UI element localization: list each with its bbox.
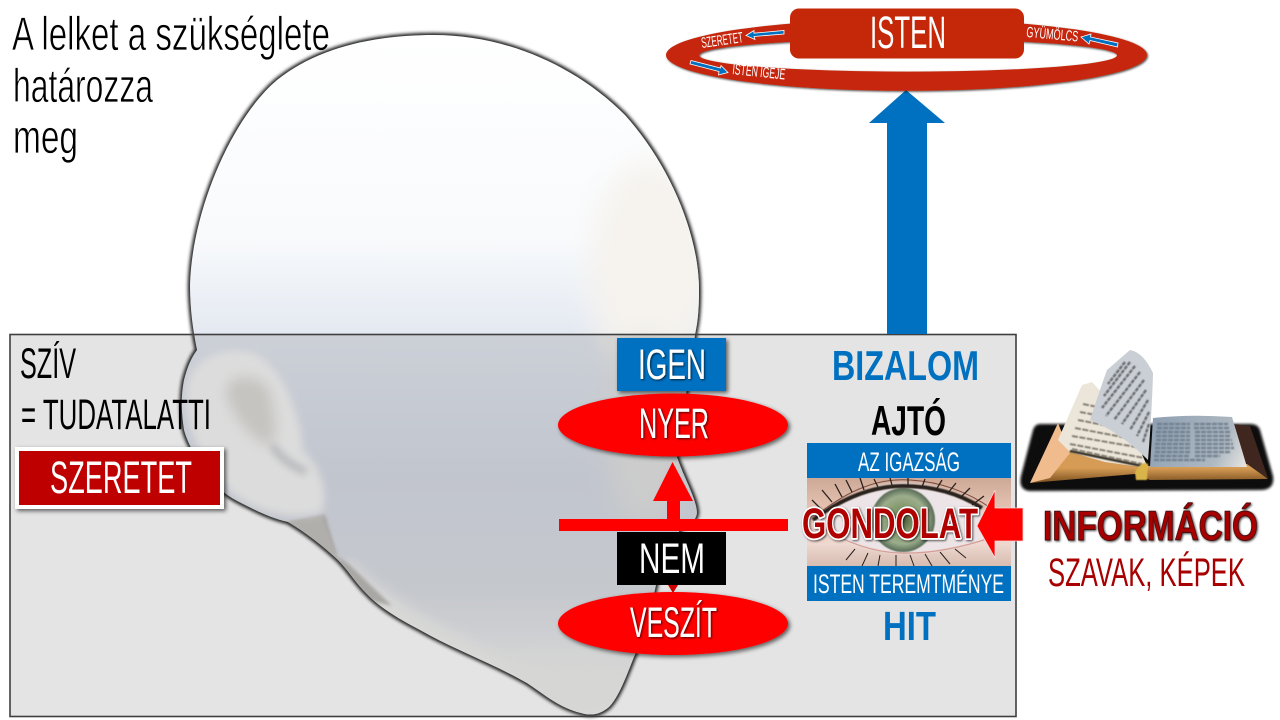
title: A lelket a szükséglete [12, 7, 330, 60]
flipped lower pages [1058, 382, 1148, 468]
arrow: up to gain [653, 462, 693, 520]
book cover [1020, 424, 1273, 491]
heading: heart: = TUDATALATTI [21, 391, 211, 439]
ring arrow: fruit [1081, 34, 1118, 47]
flipped upper page [1090, 350, 1153, 460]
gilt spine [1135, 463, 1148, 480]
title: meg [13, 110, 78, 163]
arrow: trust upward [869, 90, 945, 334]
lashes and lid [812, 478, 1000, 566]
ring label: love: SZERETET [700, 29, 744, 52]
threshold line [559, 519, 788, 531]
ring label: fruit: GYÜMÖLCS [1026, 23, 1079, 46]
box: no [617, 532, 726, 585]
ellipse: lose [558, 592, 788, 655]
heading: trust: BIZALOM [832, 342, 979, 389]
right page [1150, 416, 1247, 467]
arrow: information into thought [977, 490, 1023, 558]
box: no: NEM [639, 535, 705, 583]
box: God [790, 7, 1024, 58]
label: love [17, 449, 222, 507]
title: határozza [13, 59, 154, 112]
decision column [558, 338, 788, 655]
bar: God's creation: ISTEN TEREMTMÉNYE [813, 569, 1004, 599]
bar: the truth: AZ IGAZSÁG [858, 447, 960, 477]
left peach edge [1030, 423, 1070, 483]
ellipse: gain: NYER [639, 400, 709, 448]
eye white [813, 483, 990, 553]
bar: God's creation [807, 566, 1011, 601]
page edges [1030, 452, 1268, 483]
heading: heart: SZÍV [20, 340, 76, 388]
ring: God cycle [666, 7, 1147, 91]
ring band [666, 19, 1147, 91]
bar: the truth [807, 443, 1011, 478]
icon: open bible [1020, 350, 1273, 491]
ring arrow: love [746, 30, 784, 40]
iris [871, 488, 935, 552]
box: yes [617, 338, 726, 391]
label: thought: GONDOLAT [802, 500, 978, 548]
ellipse: gain [558, 394, 788, 456]
heading: door: AJTÓ [871, 396, 946, 444]
panel: heart box [10, 334, 1016, 716]
ring label: word of God: ISTEN IGÉJE [732, 61, 786, 84]
ring arrow: word of God [690, 60, 728, 75]
eye photo [807, 478, 1011, 566]
box: yes: IGEN [638, 341, 706, 389]
heading: heart [20, 340, 211, 439]
ellipse: lose: VESZÍT [630, 599, 717, 647]
connector tip [668, 585, 678, 593]
right page text lines [1154, 424, 1234, 460]
heading: faith: HIT [883, 603, 936, 649]
box: God: ISTEN [870, 7, 946, 58]
label: love: SZERETET [50, 452, 192, 503]
title [12, 7, 330, 163]
head illustration [182, 35, 710, 718]
right cover edge [1232, 424, 1268, 478]
